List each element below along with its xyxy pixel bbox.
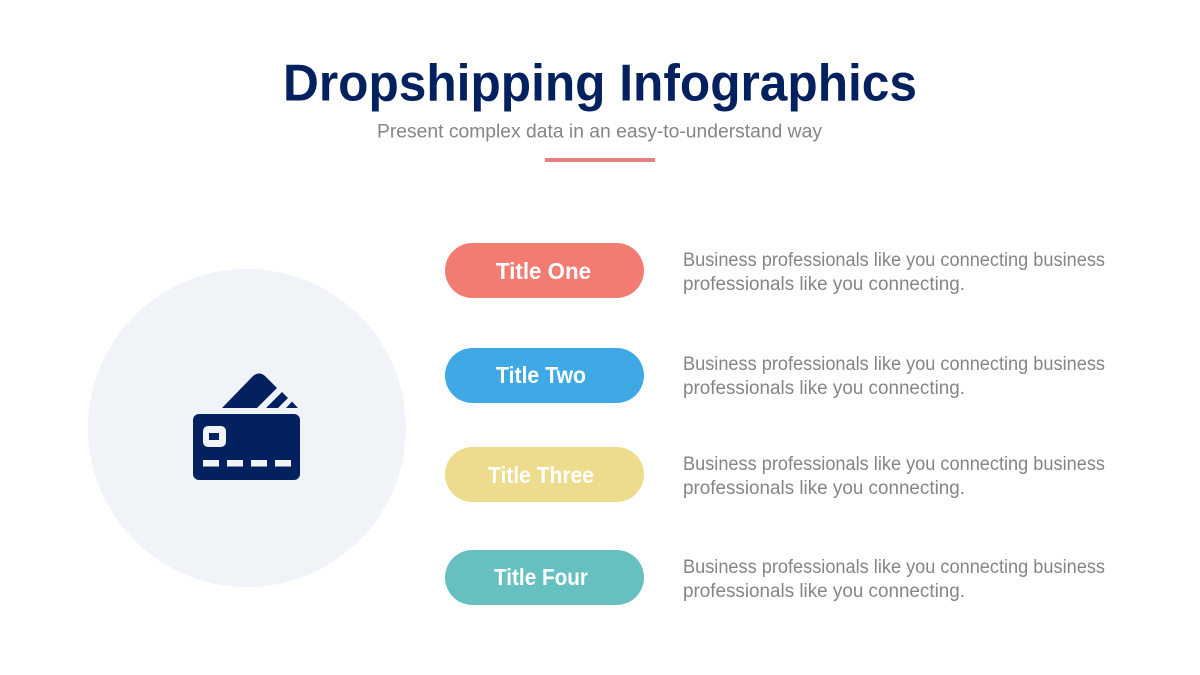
- pill: title one: [445, 243, 644, 298]
- pill: title two: Title Two: [496, 362, 586, 388]
- text block: description two: Business professionals like you connecting business: [683, 354, 1105, 375]
- pill: title three: Title Three: [488, 462, 594, 488]
- pill: title four: Title Four: [494, 564, 588, 590]
- text block: description two: [683, 354, 1105, 399]
- text block: description one: Business professionals like you connecting business: [683, 250, 1105, 271]
- text block: description one: professionals like you connecting.: [683, 274, 965, 295]
- row: title two: [445, 348, 1105, 403]
- row: title three: [445, 447, 1105, 502]
- pill: title one: Title One: [496, 258, 591, 284]
- title underline accent: [545, 158, 655, 162]
- title: Dropshipping Infographics: [283, 54, 917, 112]
- text block: description one: [683, 250, 1105, 295]
- pill: title three: [445, 447, 644, 502]
- text block: description four: [683, 557, 1105, 602]
- text block: description three: professionals like you connecting.: [683, 478, 965, 499]
- row: title one: [445, 243, 1105, 298]
- panel: icon circle: [88, 269, 406, 587]
- subtitle: Present complex data in an easy-to-understand way: [377, 122, 822, 142]
- text block: description two: professionals like you connecting.: [683, 378, 965, 399]
- pill: title four: [445, 550, 644, 605]
- text block: description four: Business professionals like you connecting business: [683, 557, 1105, 578]
- text block: description four: professionals like you connecting.: [683, 581, 965, 602]
- pill: title two: [445, 348, 644, 403]
- text block: description three: [683, 454, 1105, 499]
- text block: description three: Business professionals like you connecting business: [683, 454, 1105, 475]
- row: title four: [445, 550, 1105, 605]
- icon: credit cards: [193, 374, 300, 480]
